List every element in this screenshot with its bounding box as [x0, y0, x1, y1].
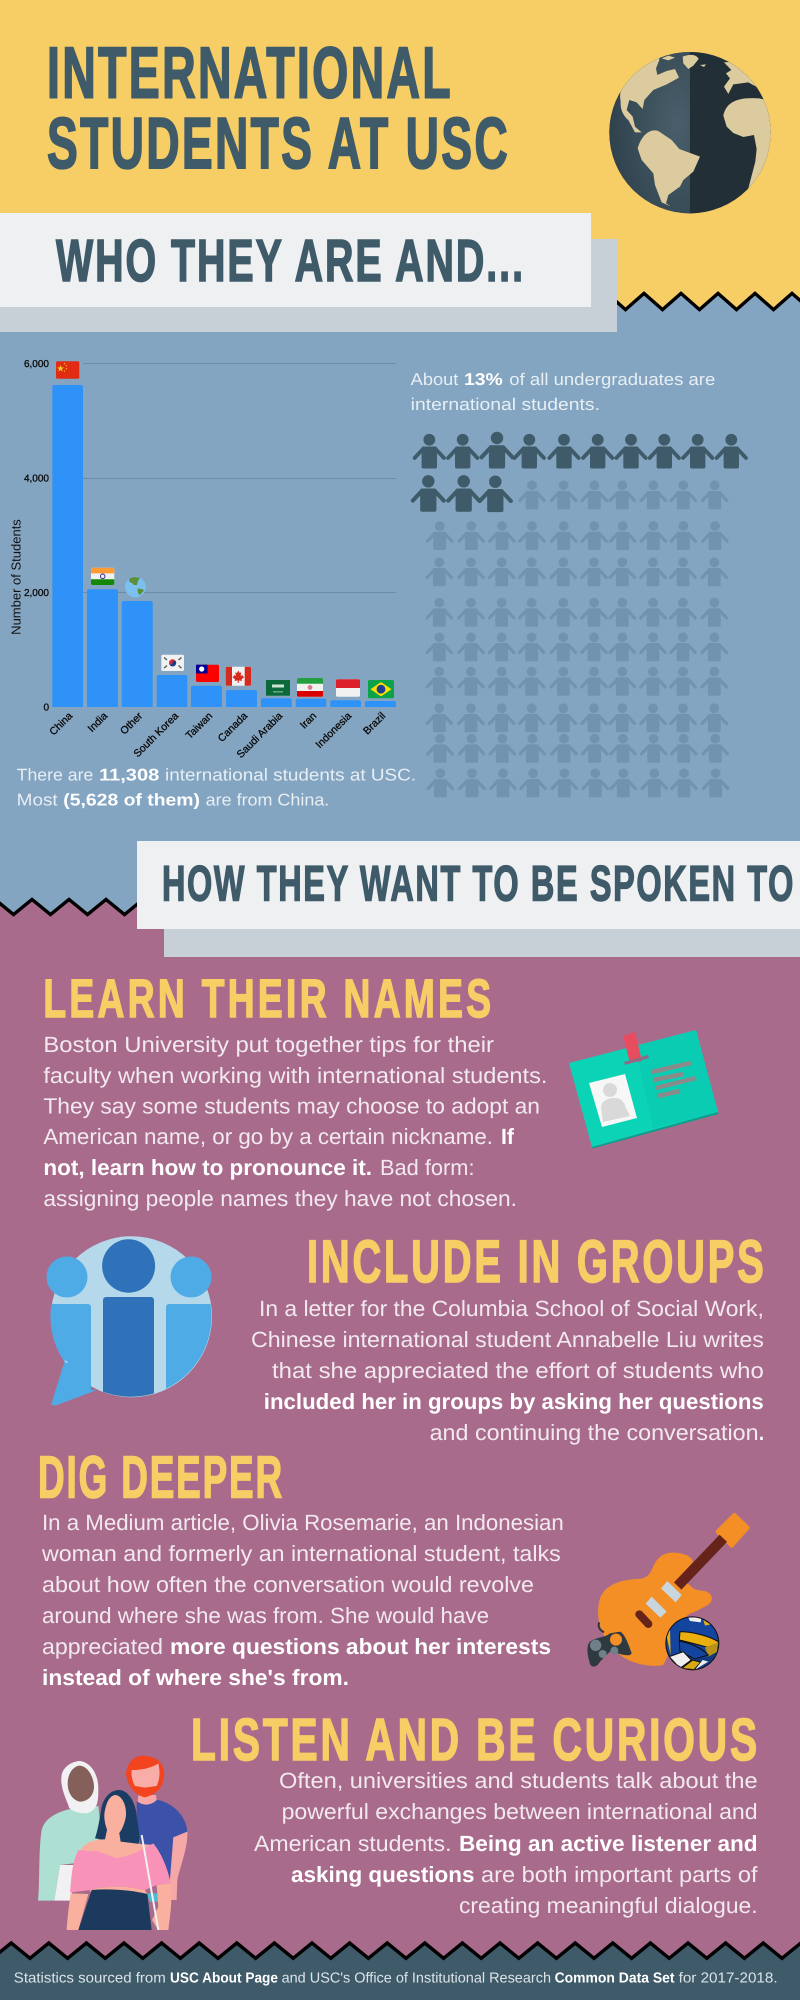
icon: flag of Brazil [368, 680, 394, 698]
icon: id card [569, 1030, 718, 1148]
footer: sources: USC About Page [170, 1970, 278, 1986]
text: dig deeper body: appreciated [42, 1634, 163, 1659]
text: dig deeper body: more questions about her interests [170, 1634, 551, 1659]
text: total international students: (5,628 of them) [63, 790, 200, 809]
footer: sources: Statistics sourced from [14, 1970, 166, 1986]
text: listen and be curious body: American students. [254, 1831, 452, 1856]
text: undergraduate percentage: About [411, 370, 459, 389]
text: dig deeper body [41, 1510, 564, 1690]
footer background [0, 1943, 800, 2000]
panel: who they are [0, 213, 617, 332]
pictogram: 13 of 100 students highlighted [413, 432, 746, 797]
text: learn their names body: not, learn how to pronounce it. [43, 1155, 372, 1180]
text: listen and be curious body [254, 1768, 759, 1918]
zigzag divider: mauve to footer [0, 1943, 800, 1958]
text: undergraduate percentage: of all undergraduates are [509, 370, 715, 389]
text: include in groups body: Chinese international student Annabelle Liu writes [251, 1327, 764, 1352]
text: undergraduate percentage [411, 370, 715, 414]
text: listen and be curious body: asking questions [291, 1862, 474, 1887]
text: dig deeper body: In a Medium article, Olivia Rosemarie, an Indonesian [42, 1510, 564, 1535]
yellow header background [0, 0, 800, 340]
text: learn their names body: American name, or go by a certain nickname. [43, 1124, 493, 1149]
text: listen and be curious body: Often, universities and students talk about the [279, 1768, 758, 1793]
bar chart: students by country: Number of Students [8, 519, 24, 635]
bar chart: students by country: South Korea [131, 710, 181, 760]
title: STUDENTS AT USC [47, 103, 510, 184]
text: learn their names body: faculty when working with international students. [43, 1063, 547, 1088]
text: include in groups body: . [759, 1420, 764, 1445]
title [47, 32, 510, 184]
footer: sources: for 2017-2018. [679, 1970, 778, 1986]
text: listen and be curious body: Being an active listener and [459, 1831, 758, 1856]
text: learn their names body: They say some students may choose to adopt an [43, 1094, 540, 1118]
footer: sources: Common Data Set [555, 1970, 675, 1986]
mauve section background [0, 899, 800, 1965]
bar chart: students by country: Taiwan [184, 710, 215, 742]
text: dig deeper body: about how often the conversation would revolve [42, 1572, 534, 1597]
icon: globe [607, 50, 773, 217]
icon: flag of South Korea [161, 655, 184, 671]
bar chart: students by country: Other [118, 710, 145, 737]
text: learn their names body: Boston University put together tips for their [43, 1032, 494, 1057]
text: include in groups body: included her in groups by asking her questions [264, 1389, 764, 1414]
text: learn their names body: assigning people names they have not chosen. [43, 1186, 517, 1211]
text: learn their names body: Bad form: [380, 1155, 474, 1180]
footer: sources: and USC's Office of Institutional Research [282, 1970, 551, 1986]
bar chart: students by country: India [86, 710, 110, 735]
footer: sources [14, 1970, 778, 1986]
icon: flag of Taiwan [196, 665, 219, 682]
icon: flag of Canada [226, 667, 251, 686]
icon: group speech bubble [45, 1236, 216, 1410]
icon: flag of Saudi Arabia [266, 680, 290, 696]
text: include in groups body [251, 1296, 764, 1445]
text: total international students: There are [17, 766, 93, 785]
text: learn their names body: If [501, 1124, 515, 1149]
bar chart: students by country: China [47, 710, 75, 738]
bar chart: students by country: Indonesia [313, 710, 354, 751]
heading: learn their names: LEARN THEIR NAMES [43, 969, 494, 1029]
bar chart: students by country: Iran [298, 710, 319, 731]
zigzag divider: yellow to blue [607, 293, 800, 310]
text: listen and be curious body: are both important parts of [481, 1862, 759, 1887]
icon: globe emoji for other [125, 577, 146, 597]
bar chart: students by country: Canada [216, 710, 250, 745]
text: listen and be curious body: powerful exchanges between international and [282, 1799, 758, 1824]
bar chart: students by country: Saudi Arabia [235, 710, 285, 761]
panel: how they want to be spoken to [137, 841, 800, 957]
text: total international students: Most [17, 790, 58, 809]
heading: dig deeper: DIG DEEPER [38, 1444, 284, 1510]
bar chart: students by country [8, 359, 396, 761]
section: learn their names [43, 969, 718, 1211]
text: total international students: are from China. [206, 790, 329, 809]
bar chart: students by country: 4,000 [24, 474, 49, 484]
section: include in groups [45, 1228, 766, 1445]
section: dig deeper [38, 1444, 748, 1690]
icon: flag of China [56, 361, 79, 379]
icon: flag of Iran [297, 678, 323, 697]
icon: flag of India [91, 568, 114, 585]
bar chart: students by country: 0 [43, 702, 49, 714]
text: include in groups body: and continuing the conversation [430, 1420, 759, 1445]
bar chart: students by country: 2,000 [24, 588, 49, 599]
text: undergraduate percentage: international students. [411, 395, 600, 414]
text: learn their names body [43, 1032, 547, 1211]
icon: flag of Indonesia [336, 679, 360, 697]
text: dig deeper body: woman and formerly an international student, talks [41, 1541, 561, 1566]
text: include in groups body: In a letter for the Columbia School of Social Work, [259, 1296, 764, 1321]
illustration: three students [38, 1756, 187, 1930]
zigzag divider: blue to mauve [0, 899, 143, 915]
section: listen and be curious [38, 1706, 760, 1930]
heading: who they are and: WHO THEY ARE AND... [56, 227, 525, 294]
text: undergraduate percentage: 13% [464, 370, 503, 389]
text: listen and be curious body: creating meaningful dialogue. [459, 1893, 758, 1918]
blue section background [0, 293, 800, 960]
text: total international students [17, 766, 416, 809]
text: dig deeper body: around where she was from. She would have [42, 1603, 489, 1628]
text: dig deeper body: instead of where she's from. [42, 1665, 349, 1690]
icon: guitar, game controller and volleyball [587, 1515, 748, 1672]
title: INTERNATIONAL [47, 32, 453, 113]
text: total international students: international students at USC. [165, 766, 416, 785]
text: include in groups body: that she appreciated the effort of students who [272, 1358, 764, 1383]
text: total international students: 11,308 [99, 766, 159, 785]
bar chart: students by country: 6,000 [24, 359, 49, 370]
bar chart: students by country: Brazil [361, 710, 388, 737]
